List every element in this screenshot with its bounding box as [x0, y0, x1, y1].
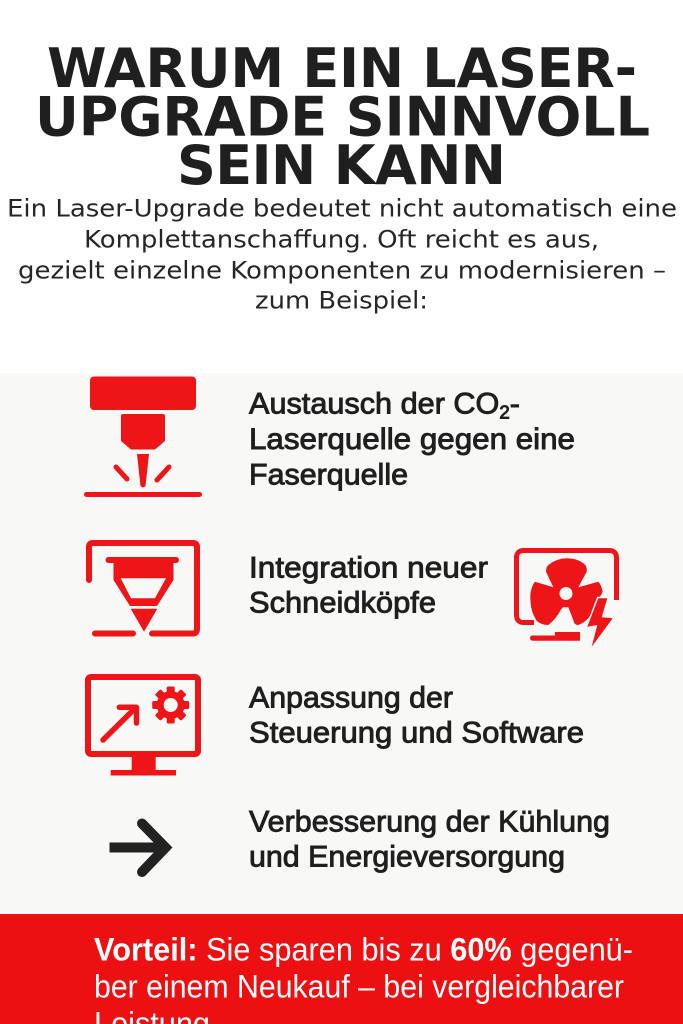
- panel: upgrade options: [0, 373, 683, 914]
- text: CO2 laser source: 2: [499, 402, 510, 422]
- text: CO2 laser source: Austausch der CO: [249, 388, 490, 420]
- text: cooling and power: Verbesserung der Kühlung: [249, 806, 610, 838]
- intro text: [7, 194, 677, 314]
- banner text: Vorteil: Sie sparen bis zu 60% gegenü-: [94, 932, 633, 968]
- intro text: zum Beispiel:: [255, 286, 428, 314]
- title: SEIN KANN: [177, 134, 506, 197]
- icon: monitor with gear: [88, 677, 198, 776]
- text: cooling and power: und Energieversorgung: [249, 840, 565, 874]
- title: UPGRADE SINNVOLL: [35, 86, 650, 148]
- text: controls and software: Anpassung der: [249, 682, 453, 714]
- banner text: ber einem Neukauf – bei vergleichbarer: [94, 968, 624, 1004]
- text: controls and software: Steuerung und Software: [249, 716, 584, 750]
- text: cooling and power: [249, 806, 610, 874]
- icon: arrow: [110, 824, 166, 872]
- text: cutting heads: [249, 552, 488, 620]
- text: CO2 laser source: -: [510, 388, 520, 420]
- text: CO2 laser source: [249, 388, 575, 492]
- intro text: Komplettanschaffung. Oft reicht es aus,: [84, 226, 599, 254]
- icon: cutting head: [89, 543, 197, 634]
- banner text: [94, 932, 633, 1024]
- text: CO2 laser source: Laserquelle gegen eine: [249, 423, 575, 456]
- intro text: Ein Laser-Upgrade bedeutet nicht automatisch eine: [7, 194, 677, 222]
- intro text: gezielt einzelne Komponenten zu modernisieren –: [18, 256, 666, 284]
- title: [35, 37, 650, 197]
- text: cutting heads: Schneidköpfe: [249, 586, 436, 620]
- icon: fan and lightning: [516, 550, 616, 647]
- title: WARUM EIN LASER-: [47, 37, 637, 100]
- panel: advantage banner: [0, 914, 683, 1024]
- text: CO2 laser source: Faserquelle: [249, 458, 408, 492]
- icon: gear: [152, 686, 189, 724]
- text: cutting heads: Integration neuer: [249, 552, 488, 584]
- text: controls and software: [249, 682, 584, 750]
- icon: laser head: [86, 376, 200, 494]
